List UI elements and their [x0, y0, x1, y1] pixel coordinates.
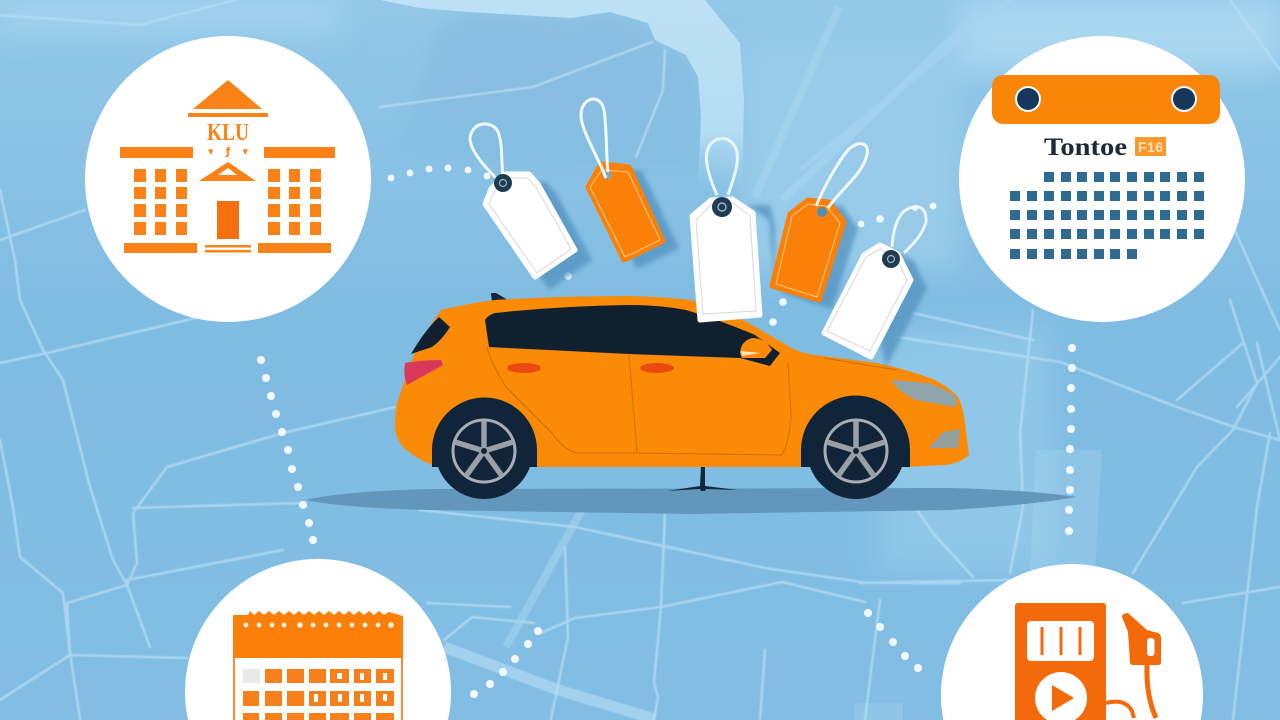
price tag 5: white [824, 207, 926, 357]
price tag 3: white [692, 138, 760, 320]
side windows [485, 305, 780, 366]
dotted connector: right [1065, 344, 1076, 535]
calendar title: Tontoe [1044, 134, 1127, 161]
price tag 4: orange [772, 144, 867, 300]
calendar day grid [1010, 172, 1204, 259]
panel: fuel pump [941, 564, 1203, 720]
tail light [404, 360, 443, 385]
car jack stand [667, 466, 738, 491]
dotted connector: left [257, 356, 317, 544]
car body [395, 296, 969, 467]
calendar header bar [992, 75, 1220, 124]
price tags group [470, 99, 927, 368]
car [395, 293, 969, 499]
side mirror [740, 338, 772, 358]
calendar badge [1135, 137, 1166, 156]
dotted connector: bottom left [470, 627, 542, 698]
door lines [487, 347, 897, 455]
icon: fuel pump [1015, 603, 1161, 720]
building sign text: KLU [207, 120, 249, 146]
panel: calendar with text [959, 36, 1245, 322]
front wheel [801, 396, 910, 499]
headlight [891, 380, 956, 407]
dotted connector: near tags [564, 203, 936, 326]
price tag 1: white [470, 124, 575, 277]
calendar badge: F16 [1138, 139, 1163, 155]
panel: wall calendar [185, 559, 451, 720]
icon: building [120, 80, 335, 253]
building small text: ▾ƒ▾ [208, 145, 248, 158]
fog light [929, 429, 960, 448]
rear wheel [432, 398, 537, 499]
dotted connector: top left [388, 165, 490, 181]
ground shadow under car [305, 488, 1077, 514]
car antenna [491, 293, 508, 302]
rear window [411, 317, 450, 354]
door handles [507, 363, 541, 373]
dotted connector: bottom right [864, 609, 922, 672]
panel: bank building [85, 36, 371, 322]
icon: wall calendar [233, 611, 403, 720]
price tag 2: orange [581, 99, 663, 260]
